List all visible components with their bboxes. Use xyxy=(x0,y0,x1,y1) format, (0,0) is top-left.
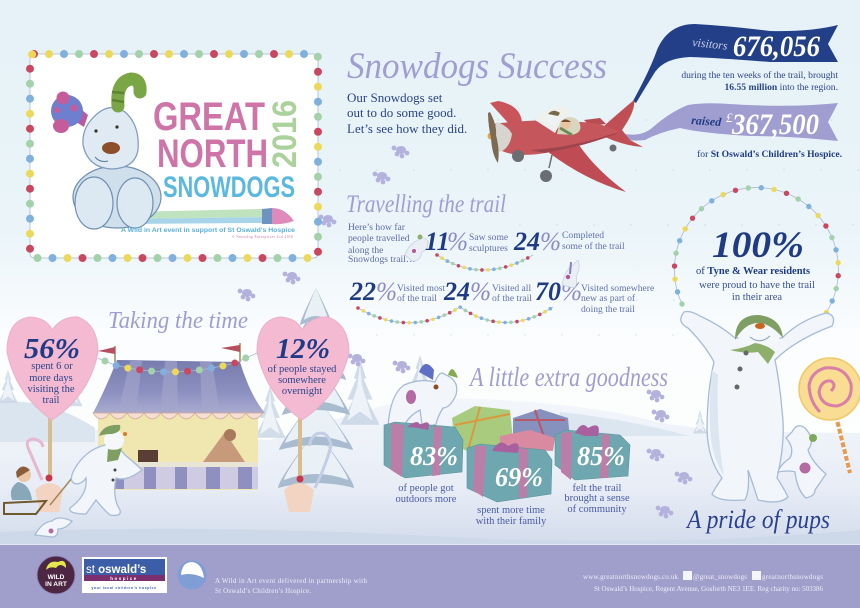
gift labels: brought a sense xyxy=(564,493,630,504)
stat: 70% visited somewhere new: new as part of xyxy=(581,293,636,304)
lollipop xyxy=(799,358,860,473)
trail intro text: Snowdogs trail… xyxy=(348,254,415,265)
intro text: out to do some good. xyxy=(347,105,456,120)
footer contact line xyxy=(583,571,824,593)
gift: 83% xyxy=(384,422,463,478)
panel: a little extra goodness xyxy=(384,362,668,527)
distant trees xyxy=(0,355,707,438)
stat: 24% completed some: Completed xyxy=(562,230,604,241)
footer contact line: greatnorthsnowdogs xyxy=(762,573,823,581)
icon: boy on sled xyxy=(4,466,46,514)
icon: small snowman pulling sled xyxy=(50,425,142,515)
string of lights xyxy=(98,353,257,372)
stat: 11% saw some sculptures: Saw some xyxy=(469,232,508,243)
banner: raised xyxy=(618,103,838,141)
icon: sitting pup xyxy=(562,260,579,288)
stat: 70% visited somewhere new: % xyxy=(561,277,582,306)
trail intro text: people travelled xyxy=(348,233,410,244)
icon: snowdog on gift xyxy=(388,364,458,428)
logo: the snowman xyxy=(178,560,206,590)
icon: big snowman xyxy=(681,312,834,502)
tree xyxy=(278,288,354,488)
gift labels: with their family xyxy=(476,516,547,527)
logo title: A Wild in Art event in support of St Oswald's Hospice xyxy=(121,227,295,234)
intro text: Our Snowdogs set xyxy=(347,90,443,105)
visitors caption: during the ten weeks of the trail, brought xyxy=(681,70,838,81)
title: Snowdogs Success xyxy=(347,46,607,87)
gift labels xyxy=(396,483,630,527)
footer partnership text: A Wild in Art event delivered in partnership with xyxy=(215,577,368,585)
stat: 24% completed some: 24 xyxy=(513,227,540,256)
dotted border xyxy=(30,54,318,258)
garland bottom row xyxy=(358,307,553,323)
logo title: 2016 xyxy=(266,100,304,168)
stat: 100%: of Tyne & Wear residents xyxy=(696,266,810,277)
heading: travelling the trail: Travelling the trail xyxy=(346,191,506,218)
footer contact line: www.greatnorthsnowdogs.co.uk xyxy=(583,573,678,581)
banner: raised: 367,500 xyxy=(731,108,819,141)
stat: 24% visited all: Visited all xyxy=(492,283,531,294)
gift: 83%: 83% xyxy=(410,441,458,471)
stat: 100%: 100% xyxy=(712,225,804,266)
back gifts xyxy=(452,406,570,455)
footer contact line: St Oswald’s Hospice, Regent Avenue, Gosforth NE3 1EE. Reg charity no: 503386 xyxy=(594,585,824,593)
stat: 24% completed some: some of the trail xyxy=(562,241,625,252)
trail intro text: along the xyxy=(348,245,383,256)
banner: raised: raised xyxy=(691,113,723,129)
logo: st oswald's hospice: your local children’s hospice xyxy=(91,586,157,590)
heading: taking the time: Taking the time xyxy=(108,308,248,334)
logo title: NORTH xyxy=(157,132,268,176)
icon: small pup running xyxy=(35,518,72,537)
logo title: © Snowdog Enterprises Ltd 2016 xyxy=(232,234,293,239)
footer contact line: @great_snowdogs xyxy=(693,573,747,581)
heart balloon left: visiting the xyxy=(28,384,75,395)
intro text xyxy=(347,90,467,136)
gift labels: of community xyxy=(567,504,627,515)
banner: visitors: visitors xyxy=(692,35,729,53)
raised caption: for St Oswald’s Children’s Hospice. xyxy=(697,149,842,160)
footer partnership text xyxy=(215,577,368,595)
heart balloon left: 56% xyxy=(24,334,80,365)
paw prints xyxy=(238,146,692,518)
stat: 11% saw some sculptures: sculptures xyxy=(469,243,508,254)
candy cane right xyxy=(310,433,331,488)
heart balloon right: somewhere xyxy=(278,375,326,386)
heart balloon right xyxy=(257,317,349,512)
stat: 70% visited somewhere new: Visited somewhere xyxy=(581,283,654,294)
icon: running pup xyxy=(405,234,428,261)
stat: 24% completed some: % xyxy=(540,227,561,256)
icon: red plane xyxy=(488,100,643,192)
garland circle xyxy=(674,188,838,313)
logo title: SNOWDOGS xyxy=(163,171,295,204)
candy cane left xyxy=(27,439,43,480)
footer partnership text: St Oswald’s Children’s Hospice. xyxy=(215,587,311,595)
stat: 24% visited all: 24 xyxy=(443,277,470,306)
logo: st oswald's hospice: hospice xyxy=(110,576,138,581)
stat: 70% visited somewhere new: 70 xyxy=(535,277,561,306)
heart balloon left: spent 6 or xyxy=(31,361,73,372)
logo title xyxy=(121,95,304,239)
stat: 11% saw some sculptures: 11 xyxy=(425,227,450,256)
visitors caption: 16.55 million into the region. xyxy=(724,82,838,93)
gift labels: outdoors more xyxy=(396,494,457,505)
panel: footer xyxy=(0,544,860,608)
stat: 70% visited somewhere new xyxy=(535,277,654,315)
intro text: Let’s see how they did. xyxy=(347,121,467,136)
logo: st oswald's hospice xyxy=(82,557,167,593)
heart balloon left: more days xyxy=(29,373,73,384)
stat: 24% visited all: of the trail xyxy=(492,293,532,304)
stat: 100%: were proud to have the trail xyxy=(699,280,815,291)
trail intro text: Here’s how far xyxy=(348,222,406,233)
gift labels: felt the trail xyxy=(573,483,622,494)
gift: 69% xyxy=(467,442,552,502)
heart balloon left xyxy=(7,317,98,512)
snow speckles xyxy=(340,120,860,335)
heading: a pride of pups: A pride of pups xyxy=(685,505,830,534)
stat: 22% visited most xyxy=(349,277,446,306)
stat: 22% visited most: Visited most xyxy=(397,283,446,294)
heart balloon right: 12% xyxy=(276,334,330,365)
gift labels: spent more time xyxy=(477,505,545,516)
stat: 24% completed some xyxy=(513,227,625,256)
banner: raised: £ xyxy=(726,110,733,125)
banner: visitors: 676,056 xyxy=(733,30,820,63)
stat: 100%: in their area xyxy=(732,292,782,303)
banner: visitors xyxy=(633,24,838,103)
paintbrush xyxy=(125,208,294,224)
icon: logo snowdog xyxy=(51,79,161,229)
panel: logo card xyxy=(30,54,318,258)
stat: 22% visited most: % xyxy=(376,277,397,306)
gift labels: of people got xyxy=(398,483,454,494)
garland top row xyxy=(437,255,533,270)
heart balloon left: trail xyxy=(43,395,60,406)
stat: 22% visited most: of the trail xyxy=(397,293,437,304)
logo: wild in art xyxy=(37,556,75,594)
stat: 24% visited all: % xyxy=(470,277,491,306)
logo: wild in art: WILD xyxy=(48,574,65,581)
stat: 11% saw some sculptures: % xyxy=(447,227,468,256)
green hat xyxy=(112,79,140,106)
logo title: GREAT xyxy=(153,95,265,139)
stat: 100% xyxy=(696,225,815,303)
stat: 11% saw some sculptures xyxy=(425,227,508,256)
gift: 85%: 85% xyxy=(577,441,625,471)
stat: 24% visited all xyxy=(443,277,532,306)
heading: a little extra goodness: A little extra goodness xyxy=(468,362,668,392)
panel: taking the time xyxy=(4,288,354,537)
logo: st oswald's hospice: st oswald’s xyxy=(86,564,146,576)
logo: wild in art: IN ART xyxy=(45,581,67,588)
gift: 69%: 69% xyxy=(495,462,543,492)
mitten ear xyxy=(51,92,88,133)
heart balloon right: overnight xyxy=(282,386,322,397)
trail intro text xyxy=(348,222,415,265)
icon: pup with lollipop xyxy=(778,426,826,498)
market stall xyxy=(93,343,265,490)
heart balloon right: of people stayed xyxy=(268,364,337,375)
stat: 22% visited most: 22 xyxy=(349,277,376,306)
visitors caption xyxy=(681,70,838,93)
gift: 85% xyxy=(555,425,630,480)
stat: 70% visited somewhere new: doing the trail xyxy=(581,304,635,315)
background snowy ground xyxy=(0,398,860,545)
